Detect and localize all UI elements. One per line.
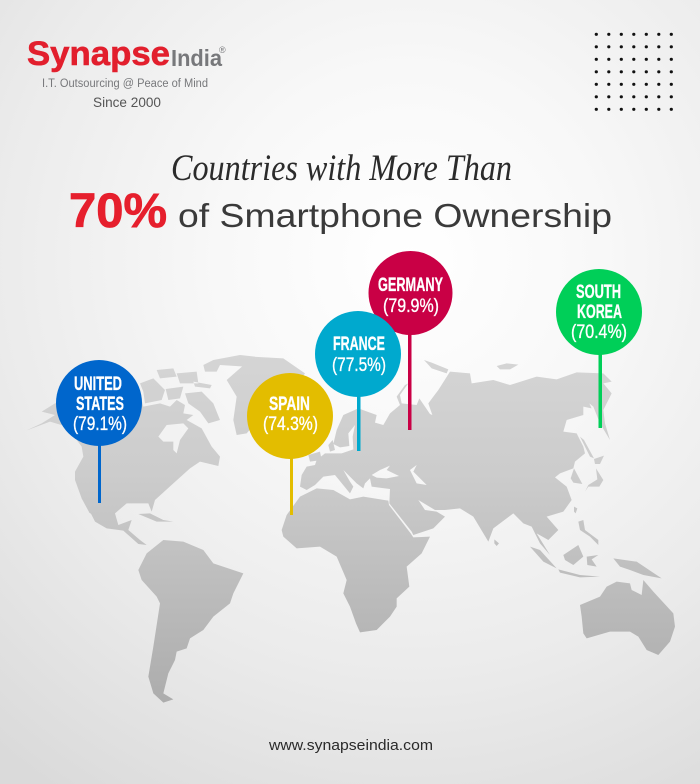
Australia <box>580 580 675 655</box>
title <box>69 148 612 238</box>
South America <box>138 540 243 703</box>
pin: South Korea <box>556 269 642 428</box>
Sulawesi <box>587 555 598 567</box>
website url: www.synapseindia.com <box>268 738 433 754</box>
logo: Since 2000 <box>93 95 161 110</box>
logo <box>27 35 226 110</box>
title: 70% <box>69 185 167 238</box>
pin: Spain: SPAIN <box>269 394 310 415</box>
pin: South Korea: KOREA <box>577 302 622 323</box>
title: Countries with More Than <box>171 148 512 189</box>
pin: France <box>315 311 401 451</box>
New Guinea <box>613 558 662 578</box>
pin: United States: (79.1%) <box>73 414 127 435</box>
logo: India <box>171 45 222 71</box>
Eurasia <box>300 372 612 555</box>
pin: Germany: (79.9%) <box>383 296 439 317</box>
world map <box>26 355 675 703</box>
logo: I.T. Outsourcing @ Peace of Mind <box>42 78 208 90</box>
pin: Spain <box>247 373 333 515</box>
Sakhalin <box>580 437 594 458</box>
pin: United States: STATES <box>76 394 124 415</box>
pin: France: (77.5%) <box>332 355 386 376</box>
pin: South Korea: (70.4%) <box>571 322 627 343</box>
pin: Germany <box>368 251 452 430</box>
Novaya Zemlya and Arctic Russia islands <box>424 360 518 373</box>
Baja California <box>82 498 94 516</box>
Philippines <box>578 520 598 545</box>
Sri Lanka and Taiwan <box>494 507 577 546</box>
Japan <box>585 456 604 492</box>
dot grid decoration <box>595 33 673 111</box>
Arctic islands <box>140 355 255 423</box>
North America <box>26 390 220 545</box>
pin: United States: UNITED <box>74 374 122 395</box>
Java <box>558 569 600 577</box>
pin: France: FRANCE <box>333 334 385 355</box>
pin: Germany: GERMANY <box>378 275 443 296</box>
pin: Spain: (74.3%) <box>263 414 318 435</box>
logo: ® <box>219 45 226 55</box>
Korea <box>571 468 582 484</box>
pin: United States <box>56 360 142 503</box>
Africa <box>282 488 430 632</box>
title: of Smartphone Ownership <box>178 197 612 234</box>
logo: Synapse <box>27 35 170 73</box>
Borneo <box>563 545 583 565</box>
Caribbean islands, Britain and Iceland <box>138 440 335 522</box>
Sumatra <box>530 547 557 568</box>
Greenland <box>227 357 305 435</box>
pin: South Korea: SOUTH <box>576 282 621 303</box>
